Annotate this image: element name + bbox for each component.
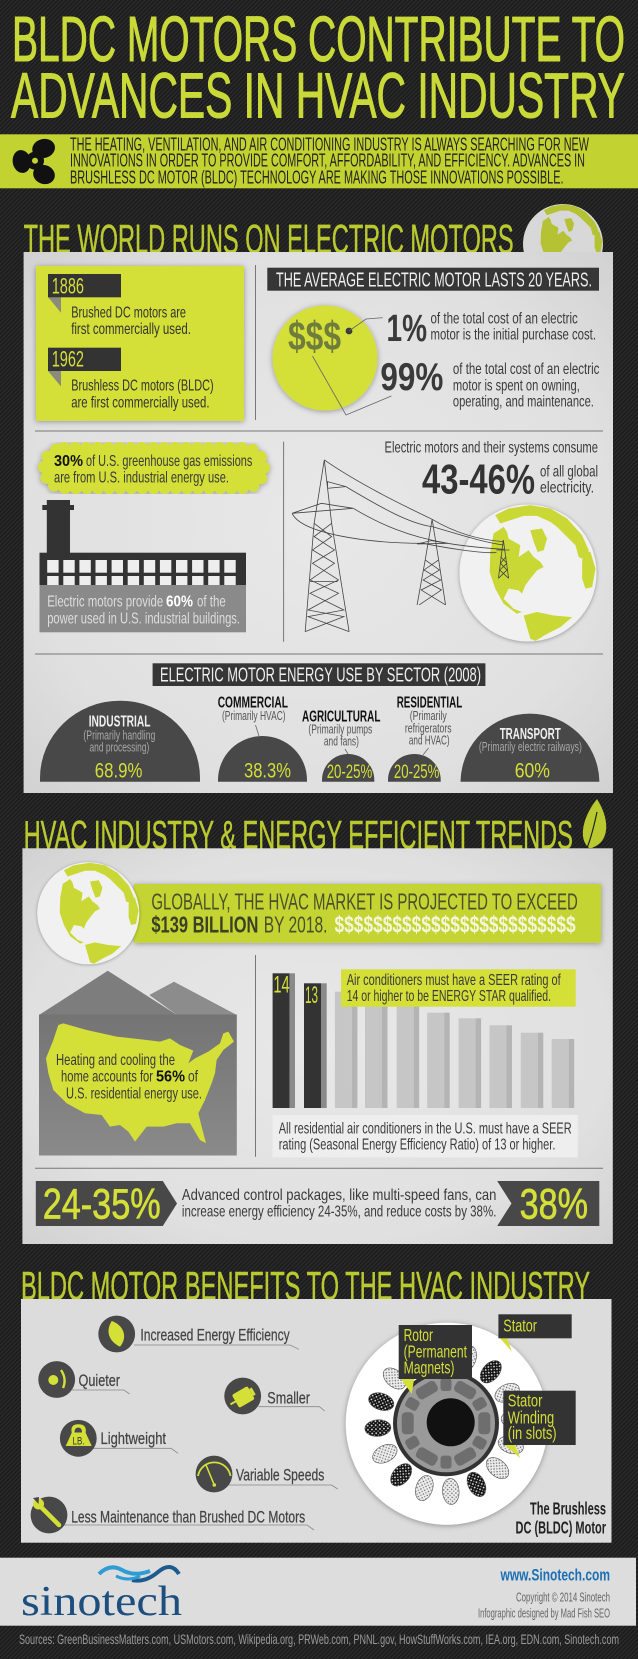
house text: 56%: [156, 1069, 185, 1086]
1886 label: 1886: [52, 273, 84, 298]
1962 text: are first commercially used.: [71, 394, 210, 411]
label: stator winding: (in slots): [508, 1423, 557, 1443]
dome: commercial: [218, 695, 307, 782]
house text: of: [188, 1069, 198, 1086]
icon: globe market: [37, 862, 139, 964]
label: rotor: Rotor: [404, 1325, 433, 1345]
bar chart: SEER ratings: [273, 972, 574, 1108]
house text: [56, 1052, 202, 1102]
market banner: [134, 884, 601, 943]
logo: sinotech: [21, 1567, 182, 1625]
1962 label: 1962: [52, 347, 84, 372]
label: stator winding: Stator: [508, 1391, 543, 1411]
stat: 99 percent: 99%: [380, 356, 443, 399]
panel: world runs on electric motors: [24, 252, 613, 793]
benefit: smaller: Smaller: [267, 1388, 310, 1407]
dome: agricultural: [302, 709, 381, 783]
control packages text: increase energy efficiency 24-35%, and reduce costs by 38%.: [182, 1204, 496, 1221]
motor diagram: [346, 1314, 606, 1537]
benefit: energy efficiency: Increased Energy Efficiency: [140, 1326, 290, 1345]
dome: residential: RESIDENTIAL: [397, 695, 462, 712]
dome: agricultural: and fans): [324, 734, 359, 749]
dome: residential: 20-25%: [394, 762, 439, 783]
cost circle: $$$: [288, 313, 341, 359]
dome: industrial: and processing): [90, 740, 149, 755]
stator windings: [364, 1342, 528, 1505]
icon: weight: LB.: [72, 1436, 84, 1448]
icon: fan: [11, 136, 58, 187]
stat: global electricity: [384, 439, 598, 502]
dome: residential: (Primarily: [410, 708, 447, 723]
stat: global electricity: of all global: [540, 464, 598, 481]
dome: residential: and HVAC): [409, 732, 450, 747]
stat arrow: 24-35 percent: 24-35%: [43, 1180, 161, 1228]
icon: house with USA map: [39, 971, 237, 1156]
callout: energy star: [341, 969, 576, 1007]
motor caption: [516, 1498, 606, 1537]
bar 13: [304, 982, 327, 1108]
dome: transport: TRANSPORT: [500, 726, 561, 743]
dome: transport: (Primarily electric railways): [479, 739, 582, 754]
stat: global electricity: 43-46%: [422, 455, 535, 502]
factory caption: 60%: [166, 594, 193, 611]
dome: agricultural: 20-25%: [327, 762, 372, 783]
1962 label: [48, 347, 121, 386]
dome: industrial: 68.9%: [95, 759, 142, 782]
stat: global electricity: electricity.: [540, 479, 594, 496]
benefit: smaller: [224, 1378, 325, 1414]
callout cloud: greenhouse gas: [44, 448, 264, 488]
footer panel: [0, 1558, 636, 1626]
1886 label: [48, 273, 121, 313]
dome: agricultural: AGRICULTURAL: [302, 709, 381, 726]
label: rotor: (Permanent: [404, 1341, 467, 1361]
benefit: quieter: [38, 1361, 130, 1398]
icon: leaf: [583, 799, 606, 848]
1886 text: [71, 304, 191, 338]
house text: Heating and cooling the: [56, 1052, 175, 1069]
label: stator: Stator: [503, 1316, 537, 1336]
dome: commercial: COMMERCIAL: [218, 695, 288, 712]
header: energy use by sector: [153, 663, 485, 687]
USA map: [46, 1023, 234, 1143]
icon: leaf: [108, 1321, 124, 1347]
benefit: lightweight: Lightweight: [100, 1429, 166, 1448]
benefit: lightweight: [60, 1420, 178, 1457]
factory caption: Electric motors provide: [47, 594, 163, 611]
dome: industrial: (Primarily handling: [83, 727, 155, 742]
benefit: quieter: Quieter: [78, 1371, 120, 1390]
rotor: [393, 1370, 499, 1476]
stat: 1 percent: of the total cost of an electric: [430, 310, 578, 327]
dome: residential: [388, 695, 462, 783]
benefit: energy efficiency: [98, 1316, 299, 1352]
house text: home accounts for: [61, 1069, 153, 1086]
timeline box: [36, 266, 244, 421]
intro text: [70, 135, 589, 187]
icon: motor: [227, 1385, 257, 1411]
label: stator winding: Winding: [508, 1407, 554, 1427]
stat: 99 percent: motor is spent on owning,: [453, 378, 580, 395]
bar 14: [273, 972, 295, 1108]
stat arrow: 38 percent: 38%: [520, 1180, 588, 1228]
label: rotor: Magnets): [404, 1357, 454, 1377]
dome: transport: 60%: [515, 759, 550, 782]
icon: transmission towers: [292, 460, 509, 632]
icon: globe with power line: [460, 504, 596, 642]
icon: wrench: [33, 1497, 59, 1525]
control packages text: Advanced control packages, like multi-speed fans, can: [182, 1187, 496, 1204]
callout cloud: greenhouse gas: are from U.S. industrial energy use.: [54, 470, 229, 487]
cost circle: [272, 306, 391, 415]
callout cloud: greenhouse gas: 30%: [54, 453, 83, 470]
intro band: [0, 134, 638, 188]
footer credits: [478, 1566, 610, 1621]
callout cloud: greenhouse gas: of U.S. greenhouse gas emissions: [86, 453, 252, 470]
benefit: less maintenance: Less Maintenance than Brushed DC Motors: [71, 1507, 305, 1526]
label: rotor: [399, 1325, 472, 1394]
benefit: variable speeds: Variable Speeds: [236, 1466, 324, 1485]
panel: hvac trends: [22, 848, 613, 1244]
factory caption: of the: [197, 594, 226, 611]
icon: factory: [40, 500, 246, 586]
panel: benefits: [21, 1299, 612, 1543]
stat: 1 percent: [386, 308, 596, 350]
icon: gauge: [198, 1462, 230, 1486]
stat: 99 percent: [380, 356, 599, 411]
control packages text: [182, 1187, 496, 1221]
dome: transport: [461, 714, 599, 782]
label: stator: [498, 1314, 572, 1352]
title: [11, 3, 625, 131]
dome: commercial: (Primarily HVAC): [222, 708, 286, 723]
dome: industrial: [40, 701, 200, 782]
factory caption: power used in U.S. industrial buildings.: [47, 610, 240, 627]
bar 14: 14: [273, 972, 290, 999]
benefit: less maintenance: [31, 1497, 314, 1533]
factory caption: [40, 585, 246, 632]
dome: residential: refrigerators: [405, 720, 452, 735]
dome: industrial: INDUSTRIAL: [89, 714, 151, 731]
1962 text: [71, 378, 214, 411]
logo: sinotech: sinotech: [21, 1579, 182, 1625]
benefit: variable speeds: [196, 1456, 338, 1492]
note: seer minimum: [273, 1115, 578, 1157]
stat: 1 percent: 1%: [386, 308, 427, 350]
dome: commercial: 38.3%: [244, 759, 291, 782]
label: stator winding: [503, 1391, 576, 1458]
1962 text: Brushless DC motors (BLDC): [71, 378, 214, 395]
icon: globe behind heading: [523, 204, 603, 284]
1886 text: Brushed DC motors are: [71, 304, 186, 321]
1886 text: first commercially used.: [71, 321, 191, 338]
dome: agricultural: (Primarily pumps: [308, 721, 373, 736]
market banner: $139 BILLION: [151, 912, 258, 938]
icon: sound: [48, 1370, 65, 1388]
bar 13: 13: [305, 982, 318, 1009]
market banner: BY 2018.: [264, 912, 328, 938]
house text: U.S. residential energy use.: [66, 1085, 202, 1102]
